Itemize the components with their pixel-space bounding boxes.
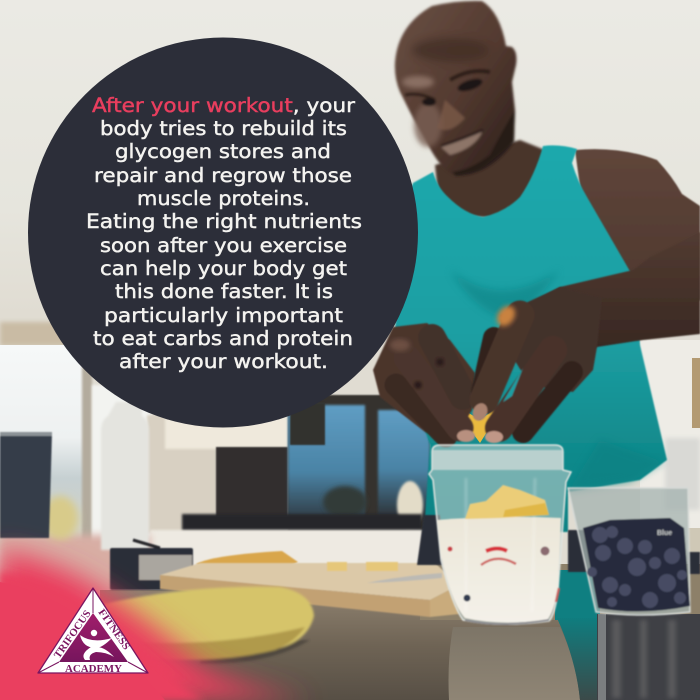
text block: after your workout (86, 94, 362, 373)
logo: FITNESS text: FITNESS (96, 607, 132, 652)
text block: after your workout: Eating the right nutrients (86, 210, 362, 233)
board: right face (430, 585, 459, 617)
text block: after your workout: glycogen stores and (115, 140, 331, 163)
logo: white triangle (38, 588, 148, 673)
reflections on counter (448, 614, 700, 700)
right hand: fingers (482, 338, 494, 392)
man: forearm (500, 232, 700, 370)
dark cup on left (0, 432, 52, 538)
man: nose (437, 100, 465, 130)
man: forehead shading (412, 38, 488, 62)
fruit being squeezed (448, 400, 507, 443)
jar: strawberries and berries (486, 548, 507, 551)
logo: ACADEMY text: ACADEMY (65, 664, 123, 675)
kitchen background scene (0, 322, 700, 595)
man: eyes and brows (405, 94, 435, 100)
right hand: highlight on knuckle (493, 302, 519, 330)
logo: inner purple triangle (59, 613, 128, 662)
jar: rim (432, 450, 563, 470)
text block: after your workout: this done faster. It is (115, 280, 333, 303)
man: neck and chest skin (435, 140, 545, 220)
jar: milk (437, 517, 561, 623)
man: shoulder and upper arm (575, 149, 700, 330)
pink gradient corner (0, 550, 310, 700)
logo: figure (80, 630, 114, 660)
text block: after your workout: After your workout , your (92, 94, 356, 117)
man: teal tank top (395, 145, 667, 532)
man: trousers (417, 515, 700, 574)
berry cup (568, 488, 690, 615)
jar: glass (429, 445, 571, 624)
text block: after your workout: soon after you exercise (100, 234, 347, 257)
text block: after your workout: particularly important (104, 304, 343, 327)
logo: TRIFOCUS text: TRIFOCUS (52, 608, 94, 661)
man: mouth (441, 130, 483, 155)
text block: after your workout: muscle proteins. (137, 187, 310, 210)
cup: label text: Blue (657, 530, 672, 537)
man: shirt fold shadow (450, 270, 664, 492)
text block: after your workout: can help your body get (100, 257, 347, 280)
jar: glass highlights (466, 478, 535, 612)
man (395, 1, 700, 574)
board: top surface (160, 563, 459, 600)
man: beard shadow (452, 110, 515, 176)
board: front face (160, 575, 430, 617)
text block: after your workout: body tries to rebuild its (100, 117, 347, 140)
banana (100, 587, 314, 664)
jar: banana pieces (465, 485, 549, 519)
man: head (395, 1, 516, 176)
logo: Trifocus Fitness Academy triangle (38, 588, 148, 675)
counter top (100, 528, 700, 700)
blender jar (429, 445, 571, 624)
blurred bottle on left (101, 402, 149, 550)
text block: after your workout: after your workout. (119, 350, 328, 373)
orange food behind board (196, 551, 298, 566)
cup: glass (568, 488, 690, 615)
cup: blueberries (583, 518, 690, 612)
text block: after your workout: repair and regrow those (94, 164, 352, 187)
small black container with label (110, 540, 193, 590)
panel: dark circle (28, 38, 418, 428)
cutting board (160, 562, 459, 617)
left hand (373, 323, 475, 445)
right hand (470, 287, 602, 443)
left hand: fingers (396, 385, 446, 436)
text block: after your workout: to eat carbs and protein (93, 327, 353, 350)
